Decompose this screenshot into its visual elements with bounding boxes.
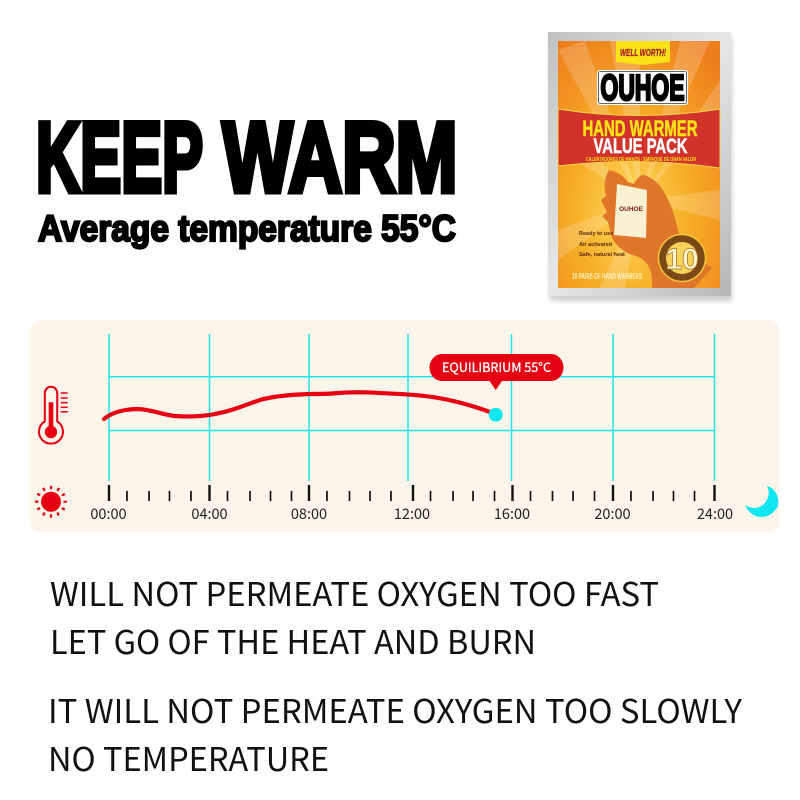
feature checklist: Air activated <box>579 242 612 248</box>
time axis labels: 04:00 <box>191 503 228 524</box>
time axis labels: 16:00 <box>494 503 530 524</box>
feature checklist: Safe, natural heat <box>579 252 625 258</box>
panel: temperature timeline chart <box>30 320 779 532</box>
feature checklist <box>579 231 625 258</box>
time axis labels: 08:00 <box>291 503 327 524</box>
hand with warmer: OUHOE <box>619 206 644 213</box>
badge: 10 hours: 10 <box>665 243 699 276</box>
title: KEEP <box>36 101 203 212</box>
product: hand warmer package <box>548 32 732 301</box>
time axis labels: 12:00 <box>394 503 430 524</box>
red band: VALUE PACK <box>594 135 688 158</box>
badge: 10 hours <box>658 234 706 282</box>
icon: moon <box>745 486 778 517</box>
text block: too fast: WILL NOT PERMEATE OXYGEN TOO FAST <box>50 568 659 616</box>
time axis labels: 24:00 <box>697 503 733 524</box>
badge: well worth: WELL WORTH! <box>620 47 666 59</box>
icon: sun <box>37 488 65 516</box>
subtitle: Average temperature 55°C <box>38 208 456 249</box>
text block: too fast: LET GO OF THE HEAT AND BURN <box>50 616 536 664</box>
callout: equilibrium: EQUILIBRIUM 55°C <box>442 357 551 376</box>
temperature curve <box>104 392 490 419</box>
feature checklist: Ready to use <box>579 231 613 237</box>
hand with warmer <box>601 170 712 288</box>
text block: too fast <box>50 568 659 664</box>
badge: well worth <box>616 41 670 65</box>
time axis labels: 00:00 <box>90 503 127 524</box>
text block: too slowly: IT WILL NOT PERMEATE OXYGEN TOO SLOWLY <box>48 685 742 733</box>
time axis labels <box>90 503 733 524</box>
red band: CALENTADORES DE MANOS · EMPAQUE DE GRAN VALOR <box>586 157 696 163</box>
brand logo <box>597 67 688 108</box>
text block: too slowly <box>48 685 742 781</box>
time axis labels: 20:00 <box>594 503 631 524</box>
title: WARM <box>222 101 458 212</box>
callout: equilibrium <box>430 354 564 390</box>
chart grid <box>109 334 714 481</box>
red band: HAND WARMER <box>582 116 698 141</box>
icon: thermometer <box>39 387 68 444</box>
time axis ticks <box>109 485 714 501</box>
brand logo: OUHOE <box>600 67 684 108</box>
red band <box>558 109 720 168</box>
title <box>36 101 458 212</box>
pack count: 10 PAIRS OF HAND WARMERS <box>572 272 642 281</box>
text block: too slowly: NO TEMPERATURE <box>48 733 329 781</box>
end point marker <box>489 408 503 422</box>
